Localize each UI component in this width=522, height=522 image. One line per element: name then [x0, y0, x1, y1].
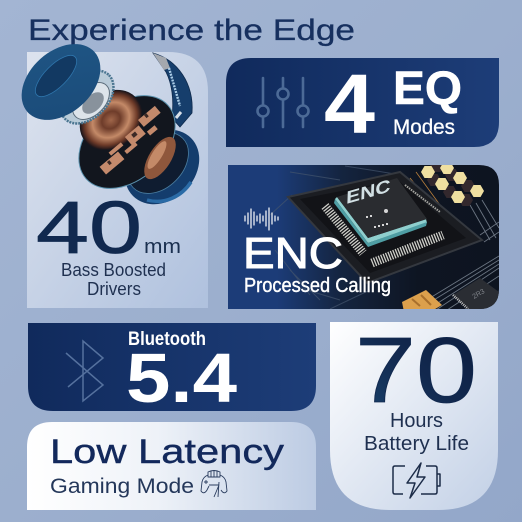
label Gaming Mode: Gaming Mode — [50, 475, 194, 498]
panel: ENC processed calling — [228, 160, 499, 312]
panel background — [27, 422, 316, 510]
circuit components — [100, 106, 161, 175]
caption: Bass Boosted Drivers: Drivers — [87, 279, 141, 299]
heading ENC: ENC — [243, 229, 343, 278]
panel background — [27, 52, 208, 308]
icon: gamepad and fist — [201, 470, 227, 497]
chip socket — [288, 172, 482, 283]
label Bluetooth: Bluetooth — [128, 329, 206, 350]
caption: Bass Boosted Drivers: Bass Boosted — [61, 260, 166, 280]
number 40: 40 — [36, 186, 142, 269]
chip teal base — [335, 197, 427, 243]
number 4: 4 — [324, 57, 375, 151]
rear ear cup — [110, 115, 214, 219]
panel background and circuit image: 2R3 — [472, 288, 486, 301]
headband — [153, 53, 192, 127]
front copper disk — [68, 78, 154, 162]
unit mm: mm — [144, 236, 181, 258]
number 70: 70 — [355, 318, 477, 422]
label Processed Calling: Processed Calling — [244, 275, 391, 297]
panel background — [226, 58, 499, 147]
gold traces — [410, 172, 440, 205]
panel background — [330, 322, 498, 510]
caption: Bass Boosted Drivers — [61, 260, 166, 299]
icon: sound waveform — [245, 208, 278, 230]
caption: Hours Battery Life — [364, 410, 469, 455]
label Modes: Modes — [393, 116, 455, 139]
rear copper layer — [138, 132, 182, 184]
caption: Hours Battery Life: Hours — [390, 410, 443, 432]
component 2R3 — [453, 278, 499, 309]
number 5.4: 5.4 — [126, 339, 237, 417]
panel background and circuit image — [228, 160, 499, 312]
chip marking: ENC — [346, 175, 391, 208]
icon: equalizer sliders — [258, 78, 308, 127]
panel: 70 hours battery life — [330, 318, 498, 510]
hexagon contacts — [427, 165, 474, 206]
panel: Low Latency gaming mode — [27, 422, 316, 510]
heading Low Latency: Low Latency — [50, 433, 284, 471]
illustration: exploded headphone — [7, 29, 214, 219]
panel: Bluetooth 5.4 — [28, 323, 316, 417]
icon: charging battery — [393, 463, 440, 498]
orange connector — [402, 290, 442, 309]
circuit traces — [432, 200, 499, 309]
icon: Bluetooth symbol — [66, 341, 103, 401]
panel background — [28, 323, 316, 411]
chip pins — [325, 206, 363, 253]
caption: Hours Battery Life: Battery Life — [364, 433, 469, 455]
chip top — [337, 178, 427, 238]
panel: 40mm drivers — [7, 29, 214, 308]
panel: 4 EQ modes — [226, 57, 499, 151]
label EQ: EQ — [393, 61, 462, 114]
circuit board — [61, 77, 193, 207]
title: Experience the Edge — [28, 14, 355, 47]
front ear cushion — [7, 29, 115, 135]
silver spring — [50, 60, 124, 134]
